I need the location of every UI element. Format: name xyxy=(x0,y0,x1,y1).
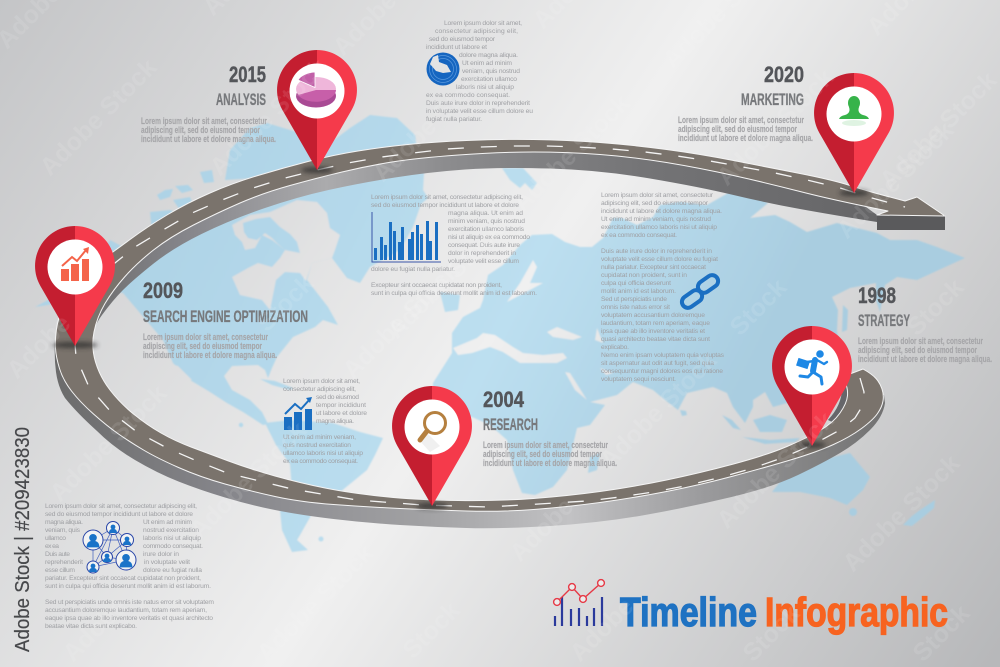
watermarks: Stock xyxy=(901,273,969,341)
heading block: 2004 research: 2004 xyxy=(483,387,524,412)
watermarks: Adobe xyxy=(57,592,132,667)
map: scandinavia and british isles xyxy=(502,168,537,190)
watermarks: Stock xyxy=(737,599,805,667)
map: arctic and greenland xyxy=(35,115,428,425)
text block: top with ring icon: ex ea commodo consequat. xyxy=(426,92,510,99)
text block: middle with bar chart: sed do eiusmod tempor incididunt ut labore et dolore xyxy=(371,202,519,209)
pin shadows xyxy=(52,167,869,509)
pin: 2015 analysis xyxy=(277,50,357,170)
icon: magnifier xyxy=(420,412,446,452)
heading block: 2015 analysis: ANALYSIS xyxy=(216,91,266,109)
heading block: 2020 marketing: Lorem ipsum dolor sit amet, consectetur xyxy=(678,115,804,126)
text block: bottom left with network icon: ex ea xyxy=(45,543,59,550)
text block: top with ring icon: in voluptate velit esse cillum dolore eu xyxy=(426,108,533,115)
text block: tall right with chain icon: Duis aute irure dolor in reprehenderit in xyxy=(601,248,712,255)
text block: tall right with chain icon: Lorem ipsum dolor sit amet, consectetur xyxy=(601,192,714,199)
text block: bottom left with network icon: laboris nisi ut aliquip xyxy=(143,535,201,542)
map: seas xyxy=(453,260,613,400)
text block: lower middle with growth icon: tempor incididunt xyxy=(316,402,366,409)
watermarks: Adobe Stock xyxy=(711,406,839,534)
title logo: chart with line xyxy=(554,580,604,626)
text block: tall right with chain icon: laudantium, totam rem aperiam, eaque xyxy=(601,320,710,327)
map: north america with greenland xyxy=(35,155,428,425)
map: australia and new zealand xyxy=(772,453,870,505)
watermarks: Adobe Stock xyxy=(44,379,172,507)
icon: people network xyxy=(83,522,136,573)
text block: tall right with chain icon: sit aspernatur aut odit aut fugit, sed quia xyxy=(601,360,714,367)
text block: bottom left with network icon: accusantium doloremque laudantium, totam rem aperiam, xyxy=(45,607,207,614)
heading block: 2015 analysis: 2015 xyxy=(229,62,266,87)
icon: pie chart xyxy=(296,72,336,108)
text block: middle with bar chart: nisi ut aliquip ex ea commodo xyxy=(448,234,530,241)
text block: bottom left with network icon: beatae vitae dicta sunt explicabo. xyxy=(45,623,137,630)
watermarks: Adobe Stock xyxy=(381,216,509,344)
text block: lower middle with growth icon: ut labore et dolore xyxy=(316,410,367,417)
road: lower wall xyxy=(55,340,885,528)
text block: top with ring icon xyxy=(426,20,533,123)
watermarks: Adobe Stock xyxy=(184,416,312,544)
text block: bottom left with network icon: dolore eu fugiat nulla xyxy=(143,567,202,574)
heading block: 2020 marketing: incididunt ut labore et dolore magna aliqua. xyxy=(678,133,813,144)
icon: blue ring chart xyxy=(426,52,460,86)
watermarks: Adobe Stock xyxy=(367,59,495,187)
heading block: 2009 search engine optimization: adipiscing elit, sed do eiusmod tempor xyxy=(143,341,262,352)
heading block: 1998 strategy: 1998 xyxy=(858,283,896,308)
heading block: 2009 search engine optimization xyxy=(143,278,308,361)
text block: middle with bar chart: Lorem ipsum dolor sit amet, consectetur adipiscing elit, xyxy=(371,194,523,201)
watermarks: Adobe Stock xyxy=(204,53,332,181)
heading block: 2009 search engine optimization: incididunt ut labore et dolore magna aliqua. xyxy=(143,350,277,361)
text block: tall right with chain icon: quasi architecto beatae vitae dicta sunt xyxy=(601,336,710,343)
text block: top with ring icon: veniam, quis nostrud xyxy=(462,68,520,75)
heading block: 1998 strategy xyxy=(858,283,992,365)
icon: running man xyxy=(796,350,827,384)
text block: top with ring icon: consectetur adipiscing elit, xyxy=(435,28,518,35)
map: arctic island xyxy=(243,217,300,253)
title: Infographic xyxy=(765,589,948,635)
text block: bottom left with network icon: nostrud exercitation xyxy=(143,527,199,534)
text block: lower middle with growth icon: consectetur adipiscing elit, xyxy=(283,386,356,393)
pin: 2004 research xyxy=(392,386,472,506)
text block: middle with bar chart: exercitation ullamco laboris xyxy=(448,226,525,233)
text block: bottom left with network icon: Sed ut perspiciatis unde omnis iste natus error sit voluptatem xyxy=(45,599,214,606)
text block: bottom left with network icon xyxy=(45,503,214,630)
heading block: 2004 research: incididunt ut labore et dolore magna aliqua. xyxy=(483,458,617,469)
text block: middle with bar chart xyxy=(371,194,537,297)
text block: bottom left with network icon: magna aliqua. xyxy=(45,519,83,526)
text block: lower middle with growth icon: Ut enim ad minim veniam, xyxy=(283,434,356,441)
text block: lower middle with growth icon: ullamco laboris nisi ut aliquip xyxy=(283,450,363,457)
text block: middle with bar chart: sunt in culpa qui officia deserunt mollit anim id est laborum. xyxy=(371,290,537,297)
text block: bottom left with network icon: Duis aute xyxy=(45,551,70,558)
watermarks: Adobe Stock xyxy=(34,53,162,181)
text block: tall right with chain icon: mollit anim id est laborum. xyxy=(601,288,676,295)
watermarks: Adobe xyxy=(504,492,579,567)
pin: 1998 strategy xyxy=(772,326,852,446)
world map xyxy=(35,115,965,552)
heading block: 2004 research: RESEARCH xyxy=(483,416,538,434)
map: south america xyxy=(265,420,383,552)
text block: tall right with chain icon: voluptatem sequi nesciunt. xyxy=(601,376,676,383)
heading block: 2015 analysis: incididunt ut labore et dolore magna aliqua. xyxy=(141,134,276,145)
text block: top with ring icon: sed do eiusmod tempor xyxy=(429,36,496,43)
text block: bottom left with network icon: irure dolor in xyxy=(143,551,179,558)
text block: bottom left with network icon: veniam, quis xyxy=(45,527,81,534)
text block: top with ring icon: Duis aute irure dolor in reprehenderit xyxy=(426,100,530,107)
title xyxy=(620,589,948,635)
heading block: 1998 strategy: STRATEGY xyxy=(858,312,910,330)
watermarks: Adobe Stock xyxy=(337,256,465,384)
road: surface xyxy=(55,139,945,511)
text block: bottom left with network icon: eaque ipsa quae ab illo inventore veritatis et quasi architecto xyxy=(45,615,213,622)
road: centre dashes xyxy=(74,146,905,507)
text block: top with ring icon: incididunt ut labore et xyxy=(426,44,487,51)
text block: top with ring icon: exercitation ullamco xyxy=(461,76,517,83)
heading block: 2020 marketing: adipiscing elit, sed do eiusmod tempor xyxy=(678,124,797,135)
bar chart xyxy=(372,212,441,262)
text block: tall right with chain icon: Ut enim ad minim veniam, quis nostrud xyxy=(601,216,711,223)
text block: bottom left with network icon: sed do eiusmod tempor incididunt ut labore et dolore xyxy=(45,511,193,518)
heading block: 2009 search engine optimization: Lorem ipsum dolor sit amet, consectetur xyxy=(143,332,268,343)
text block: tall right with chain icon: consequuntur magni dolores eos qui ratione xyxy=(601,368,723,375)
heading block: 2020 marketing: 2020 xyxy=(764,62,804,87)
text block: top with ring icon: laboris nisi ut aliquip xyxy=(456,84,514,91)
text block: tall right with chain icon: incididunt ut labore et dolore magna aliqua. xyxy=(601,208,722,215)
icon: green person xyxy=(839,96,869,126)
text block: bottom left with network icon: esse cillum xyxy=(45,567,75,574)
watermarks: Adobe xyxy=(1,309,76,384)
text block: bottom left with network icon: sunt in culpa qui officia deserunt mollit anim id est laborum. xyxy=(45,583,211,590)
text block: tall right with chain icon: omnis iste natus error sit xyxy=(601,304,670,311)
text block: tall right with chain icon: Sed ut perspiciatis unde xyxy=(601,296,667,303)
heading block: 2020 marketing: MARKETING xyxy=(741,91,804,109)
text block: lower middle with growth icon xyxy=(283,378,367,465)
text block: top with ring icon: dolore magna aliqua. xyxy=(459,52,518,59)
text block: bottom left with network icon: Lorem ipsum dolor sit amet, consectetur adipiscing elit, xyxy=(45,503,197,510)
watermarks: Adobe Stock xyxy=(711,63,839,191)
watermarks: Adobe Stock xyxy=(251,539,379,667)
text block: tall right with chain icon: ipsa quae ab illo inventore veritatis et xyxy=(601,328,705,335)
text block: middle with bar chart: minim veniam, quis nostrud xyxy=(448,218,525,225)
text block: top with ring icon: fugiat nulla pariatur. xyxy=(426,116,482,123)
watermarks: Stock xyxy=(251,269,319,337)
text block: tall right with chain icon: ex ea commodo consequat. xyxy=(601,232,677,239)
text block: lower middle with growth icon: quis nostrud exercitation xyxy=(283,442,351,449)
icon: chain link xyxy=(680,273,720,310)
heading block: 2009 search engine optimization: 2009 xyxy=(143,278,183,303)
text block: tall right with chain icon: Nemo enim ipsam voluptatem quia voluptas xyxy=(601,352,725,359)
heading block: 2015 analysis: Lorem ipsum dolor sit amet, consectetur xyxy=(141,116,267,127)
text block: lower middle with growth icon: ex ea commodo consequat. xyxy=(283,458,358,465)
text block: tall right with chain icon: voluptate velit esse cillum dolore eu fugiat xyxy=(601,256,718,263)
text block: middle with bar chart: consequat. Duis aute irure xyxy=(448,242,520,249)
text block: bottom left with network icon: pariatur. Excepteur sint occaecat cupidatat non proident, xyxy=(45,575,201,582)
map: hudson and atlantic inlets xyxy=(232,200,340,310)
watermarks: Stock xyxy=(907,599,975,667)
text block: tall right with chain icon xyxy=(601,192,725,383)
watermarks: Adobe Stock xyxy=(594,346,722,474)
text block: top with ring icon: Lorem ipsum dolor sit amet, xyxy=(444,20,522,27)
road: upper wall xyxy=(92,146,877,345)
text block: bottom left with network icon: Ut enim ad minim xyxy=(143,519,192,526)
text block: tall right with chain icon: nulla pariatur. Excepteur sint occaecat xyxy=(601,264,706,271)
road xyxy=(55,139,945,528)
text block: lower middle with growth icon: sed do eiusmod xyxy=(316,394,359,401)
text block: tall right with chain icon: culpa qui officia deserunt xyxy=(601,280,671,287)
text block: middle with bar chart: Excepteur sint occaecat cupidatat non proident, xyxy=(371,282,502,289)
text block: bottom left with network icon: ullamco xyxy=(45,535,66,542)
watermarks: Adobe Stock xyxy=(507,89,635,217)
heading block: 2009 search engine optimization: SEARCH ENGINE OPTIMIZATION xyxy=(143,308,308,326)
road: inner wall at start xyxy=(828,385,849,424)
text block: tall right with chain icon: cupidatat non proident, sunt in xyxy=(601,272,687,279)
icon: blue growth chart xyxy=(284,397,312,430)
side label: adobe stock id: Adobe Stock | #209423830 xyxy=(12,427,34,652)
text block: middle with bar chart: voluptate velit esse cillum xyxy=(448,258,519,265)
heading block: 2004 research xyxy=(483,387,617,469)
text block: bottom left with network icon: reprehenderit xyxy=(45,559,83,566)
watermarks: Stock xyxy=(397,596,465,664)
map: indonesia xyxy=(722,415,800,444)
text block: tall right with chain icon: exercitation ullamco laboris nisi ut aliquip xyxy=(601,224,717,231)
text block: lower middle with growth icon: magna aliqua. xyxy=(316,418,354,425)
watermarks: Adobe xyxy=(564,592,639,667)
heading block: 2015 analysis xyxy=(141,62,276,145)
text block: tall right with chain icon: adipiscing elit, sed do eiusmod tempor xyxy=(601,200,709,207)
text block: middle with bar chart: dolore eu fugiat nulla pariatur. xyxy=(371,266,455,273)
map: japan, madagascar, sri lanka xyxy=(842,305,848,332)
text block: lower middle with growth icon: Lorem ipsum dolor sit amet, xyxy=(283,378,360,385)
heading block: 2015 analysis: adipiscing elit, sed do eiusmod tempor xyxy=(141,125,260,136)
text block: middle with bar chart: magna aliqua. Ut enim ad xyxy=(448,210,523,217)
text block: middle with bar chart: dolor in reprehenderit in xyxy=(448,250,516,257)
text block: tall right with chain icon: voluptatem accusantium doloremque xyxy=(601,312,705,319)
icon: orange growth chart xyxy=(61,247,89,281)
watermarks: Adobe Stock xyxy=(874,66,1000,194)
heading block: 2004 research: adipiscing elit, sed do eiusmod tempor xyxy=(483,449,602,460)
watermarks: Adobe Stock xyxy=(831,116,959,244)
heading block: 2020 marketing xyxy=(678,62,813,144)
title: Timeline xyxy=(620,589,757,635)
watermarks: Adobe Stock xyxy=(837,449,965,577)
watermarks: Stock xyxy=(724,273,792,341)
pin: 2020 marketing xyxy=(814,73,894,193)
text block: bottom left with network icon: commodo consequat. xyxy=(143,543,203,550)
text block: bottom left with network icon: in voluptate velit xyxy=(144,559,190,566)
heading block: 2004 research: Lorem ipsum dolor sit amet, consectetur xyxy=(483,440,608,451)
road: arrow front face xyxy=(877,215,945,230)
pin: 2009 search engine optimization xyxy=(35,226,115,346)
text block: tall right with chain icon: explicabo. xyxy=(601,344,629,351)
text block: top with ring icon: Ut enim ad minim xyxy=(462,60,512,67)
map: eurasia and africa xyxy=(433,188,965,495)
